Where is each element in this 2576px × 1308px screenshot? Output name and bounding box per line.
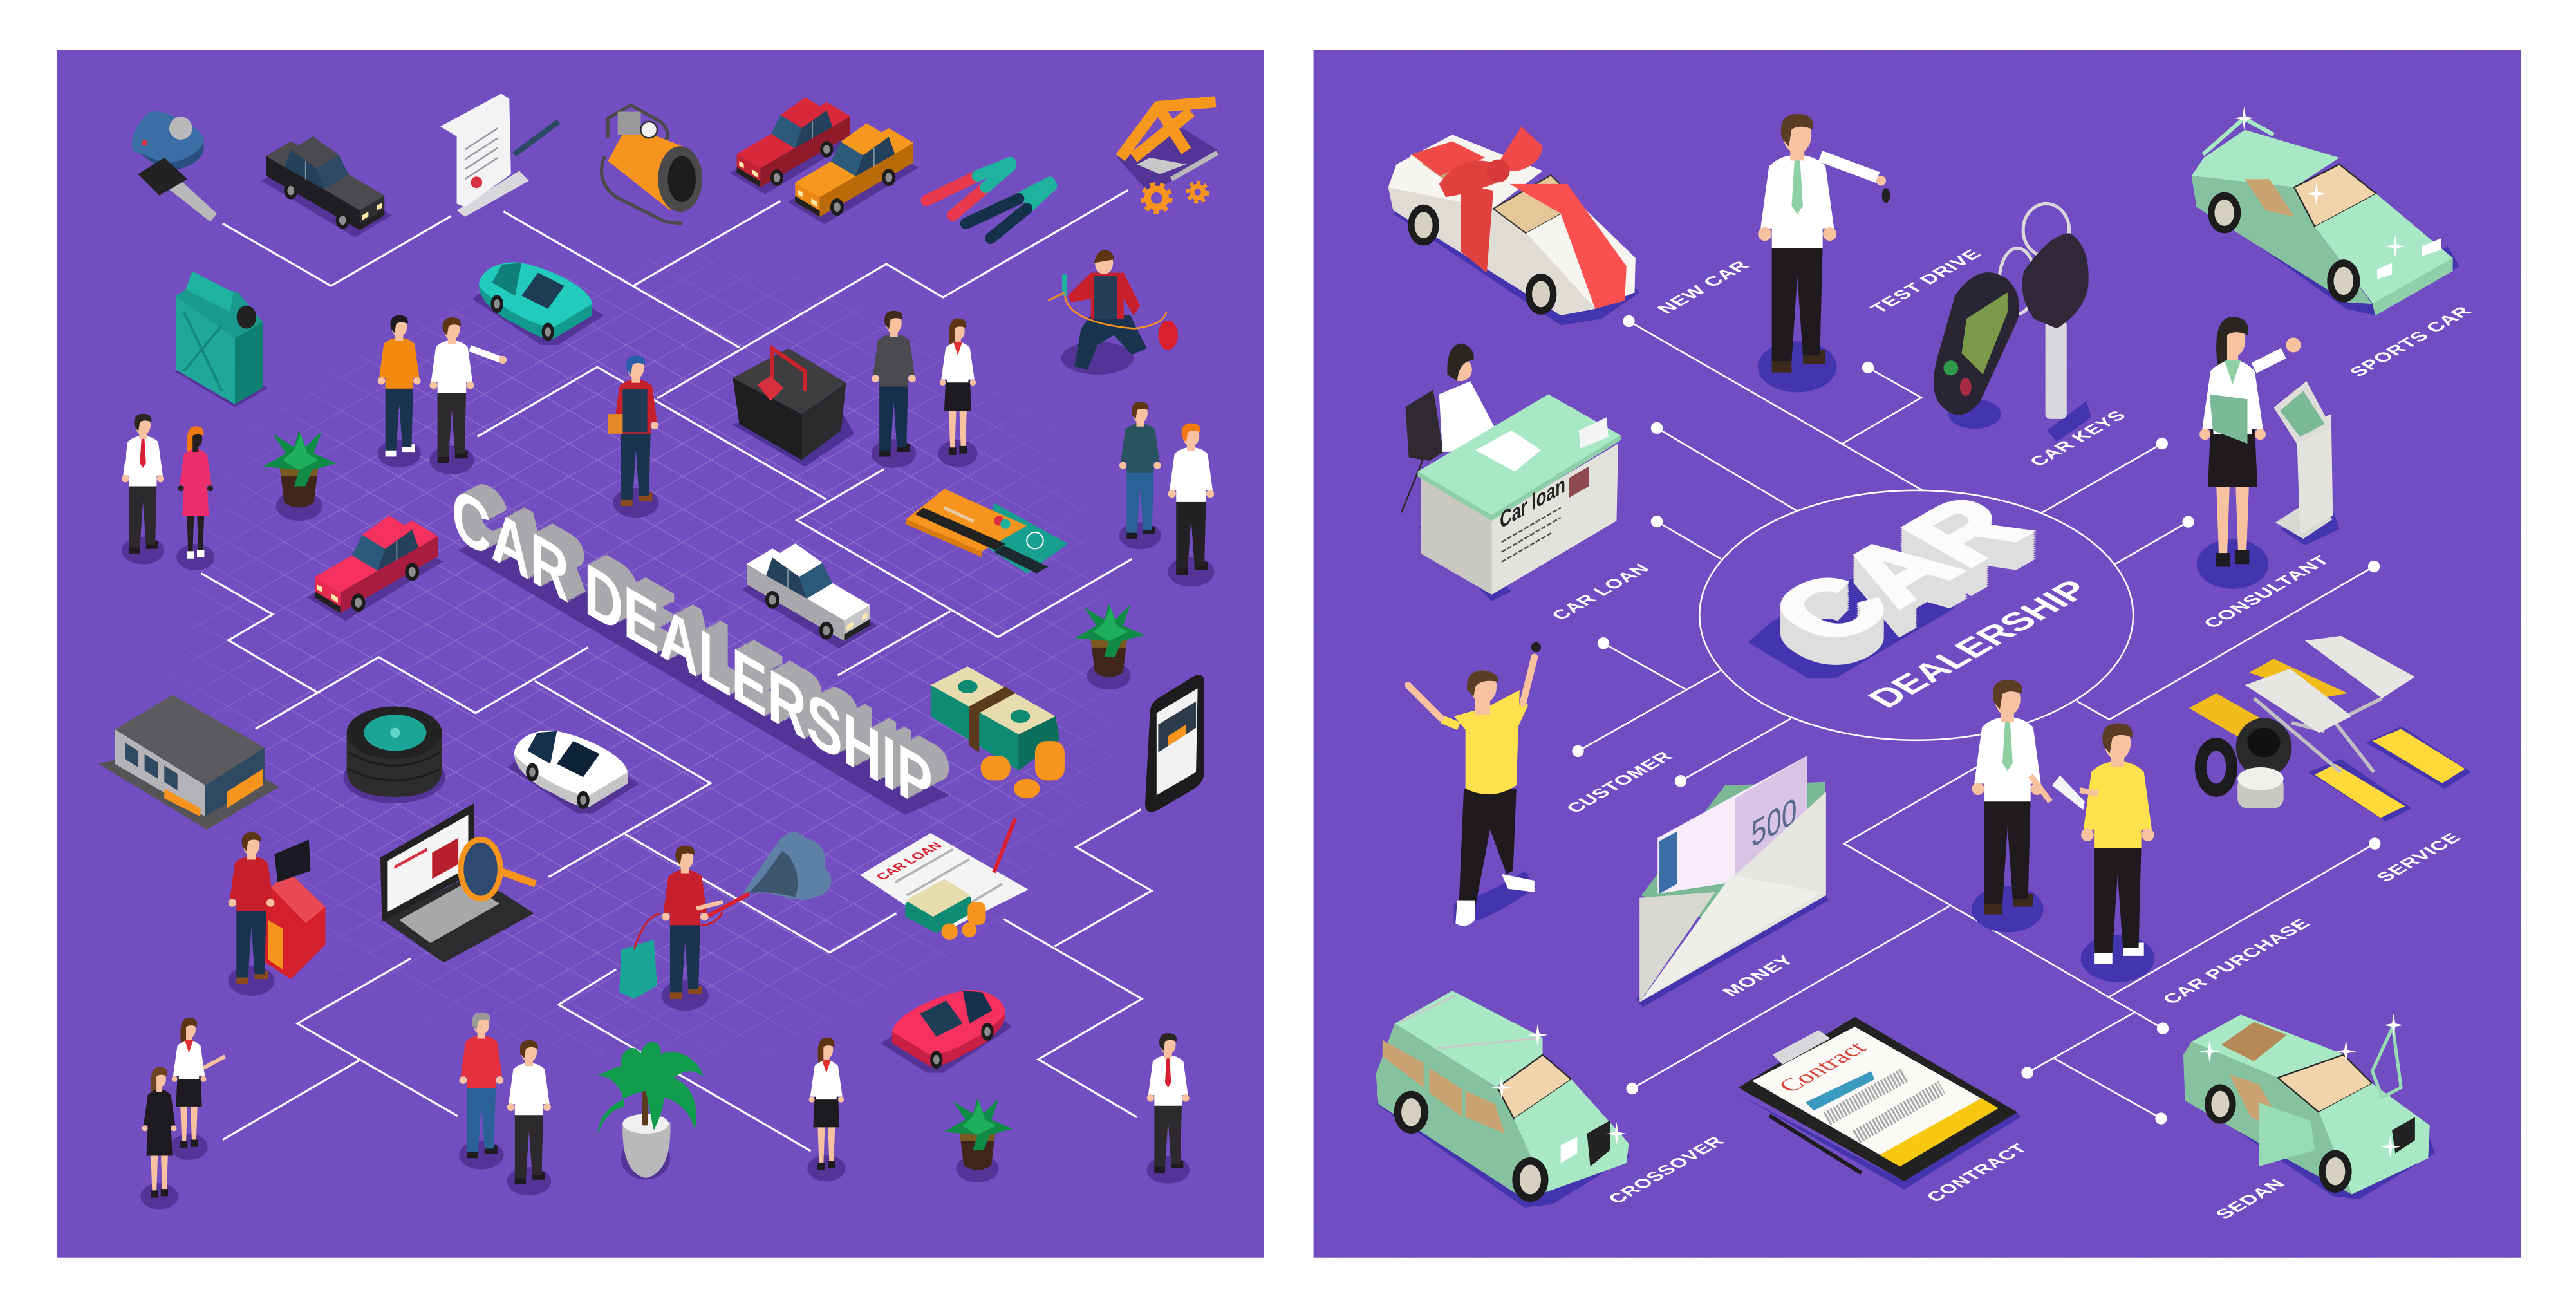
icon: car loan paper with money	[860, 818, 1029, 940]
icon: teal sports car	[472, 262, 604, 345]
connector lines with dots	[1572, 315, 2381, 1125]
person: worker with pressure washer	[619, 832, 831, 1011]
item: car loan desk with clerk	[1401, 343, 1621, 601]
item: green sedan with open doors	[2183, 1014, 2434, 1199]
panel: left isometric flowchart	[57, 50, 1264, 1258]
floor pattern	[1314, 50, 2521, 1258]
icon: potted plant	[944, 1098, 1013, 1182]
person: mechanic in blue cap	[608, 356, 658, 518]
icon: potted plant	[263, 431, 337, 521]
label: SERVICE: SERVICE	[2371, 830, 2466, 884]
icon: palm in white pot	[590, 1042, 703, 1180]
central circle	[1699, 490, 2133, 740]
item: money in envelope	[1636, 756, 1829, 1007]
heading shadow	[1748, 559, 1955, 678]
icon: jumper cables clips	[927, 163, 1051, 238]
item: car keys	[1934, 203, 2091, 442]
icon: smartphone	[1145, 675, 1204, 812]
icon: silver car	[742, 543, 877, 649]
icon: contract scroll and pen	[440, 93, 559, 217]
item: contract clipboard and pen: Contract	[1773, 1038, 1873, 1096]
item: green crossover	[1376, 991, 1630, 1208]
icon: air compressor	[601, 105, 702, 223]
title shadow	[458, 536, 949, 815]
item: happy customer with raised key	[1408, 642, 1541, 926]
people: customer and salesman	[378, 315, 507, 474]
people: couple standing	[872, 311, 978, 468]
icon: red sports car	[881, 990, 1012, 1073]
heading: CAR: CAR	[1742, 480, 2053, 659]
icon: car key fob	[131, 111, 217, 222]
label: MONEY: MONEY	[1718, 953, 1798, 999]
item: new car with ribbon	[1388, 127, 1639, 325]
item: money in envelope: 500	[1751, 789, 1797, 855]
floor grid	[178, 254, 1119, 1060]
item: service lift and tyres	[2189, 636, 2471, 821]
icon: red and orange cars	[730, 97, 919, 224]
icon: credit cards	[905, 489, 1068, 574]
heading: DEALERSHIP: DEALERSHIP	[1859, 575, 2098, 713]
people: two men talking	[1119, 402, 1215, 586]
person: female consultant	[807, 1038, 845, 1181]
person: technician at diagnostic machine	[228, 832, 325, 996]
label: SEDAN: SEDAN	[2211, 1176, 2290, 1222]
item: car loan desk with clerk: Car loan	[1500, 471, 1565, 534]
icon: stacked tyres	[343, 706, 445, 803]
people: salesman and customer	[122, 414, 214, 570]
label: CONTRACT: CONTRACT	[1922, 1141, 2031, 1204]
icon: car jack, wrench and gears	[1117, 102, 1219, 212]
icon: car loan paper with money: CAR LOAN	[873, 841, 946, 883]
label: CONSULTANT: CONSULTANT	[2199, 552, 2335, 631]
label: CAR LOAN: CAR LOAN	[1547, 561, 1654, 622]
icon: money stack and coins	[931, 666, 1065, 798]
connector lines	[201, 191, 1152, 1151]
item: consultant and info kiosk	[2197, 317, 2339, 589]
people: consultant and client women	[140, 1018, 225, 1210]
item: green sports car	[2192, 107, 2459, 315]
label: CUSTOMER: CUSTOMER	[1562, 749, 1677, 816]
item: contract clipboard and pen	[1738, 1017, 2021, 1190]
icon: black toolbox	[731, 348, 854, 467]
label: SPORTS CAR: SPORTS CAR	[2345, 304, 2476, 379]
label: CAR PURCHASE: CAR PURCHASE	[2158, 916, 2315, 1007]
person: mechanic with spray paint gun	[1048, 250, 1178, 375]
icon: potted plant	[1074, 604, 1145, 689]
icon: pink-red sedan	[307, 516, 443, 621]
label: NEW CAR: NEW CAR	[1652, 258, 1754, 316]
icon: black car	[261, 136, 392, 238]
icon: fuel jerry can	[174, 271, 268, 407]
panel: right labelled flowchart	[1314, 50, 2521, 1258]
label: CAR KEYS: CAR KEYS	[2025, 408, 2131, 469]
label: TEST DRIVE: TEST DRIVE	[1866, 247, 1986, 315]
icon: white sports car	[508, 731, 639, 813]
item: car purchase handshake	[1972, 680, 2154, 982]
item: test drive salesman with key	[1758, 114, 1890, 392]
title: CAR DEALERSHIP	[452, 470, 933, 828]
person: male consultant	[1146, 1033, 1190, 1184]
icon: laptop with magnifier	[380, 803, 536, 963]
icon: dealership building	[98, 695, 279, 830]
label: CROSSOVER: CROSSOVER	[1603, 1134, 1729, 1206]
people: handshake	[459, 1013, 551, 1195]
